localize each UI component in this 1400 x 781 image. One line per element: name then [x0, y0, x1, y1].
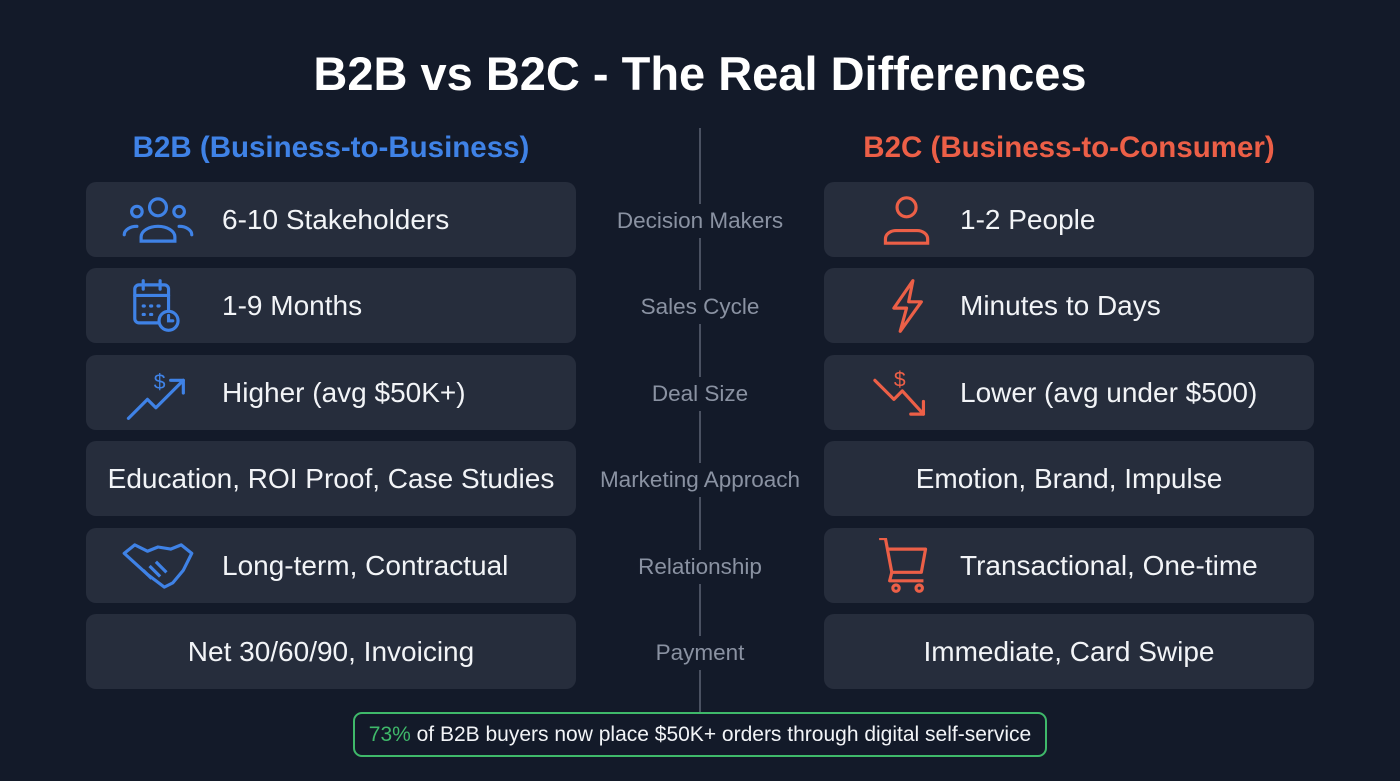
heading: B2B: B2B (Business-to-Business)	[133, 131, 529, 164]
B2B card: deal size: Higher (avg $50K+)	[222, 376, 466, 408]
B2C card: relationship: Transactional, One-time	[960, 550, 1258, 580]
B2C card: deal size	[824, 355, 1314, 430]
B2B card: months: 1-9 Months	[222, 290, 362, 320]
icon: trend up dollar	[126, 371, 185, 420]
icon: calendar clock	[133, 279, 180, 332]
label: decision makers: Decision Makers	[617, 208, 783, 233]
B2C card: people: 1-2 People	[960, 204, 1095, 234]
icon: handshake	[122, 543, 194, 589]
B2B card: payment: Net 30/60/90, Invoicing	[188, 636, 474, 666]
icon: cart	[879, 538, 928, 593]
B2B card: relationship: Long-term, Contractual	[222, 550, 508, 580]
label: deal size	[590, 377, 810, 411]
icon: trend up dollar: $	[154, 371, 166, 394]
B2B card: months	[86, 268, 576, 343]
B2C card: deal size: Lower (avg under $500)	[960, 376, 1257, 408]
B2B card: marketing	[86, 441, 576, 516]
label: relationship: Relationship	[638, 554, 762, 579]
icon: lightning	[892, 279, 923, 333]
center divider line	[699, 128, 701, 712]
callout: stat: 73% of B2B buyers now place $50K+ orders through digital self-service	[369, 723, 1031, 746]
B2C card: payment	[824, 614, 1314, 689]
label: sales cycle	[590, 290, 810, 324]
label: relationship	[590, 550, 810, 584]
B2C card: relationship	[824, 528, 1314, 603]
label: sales cycle: Sales Cycle	[641, 294, 759, 319]
label: payment	[590, 636, 810, 670]
B2B card: relationship	[86, 528, 576, 603]
callout: stat	[353, 712, 1047, 757]
B2B card: marketing: Education, ROI Proof, Case Studies	[108, 462, 554, 494]
B2C card: marketing	[824, 441, 1314, 516]
icon: group	[122, 197, 194, 243]
B2C card: sales cycle: Minutes to Days	[960, 290, 1161, 320]
label: marketing approach: Marketing Approach	[600, 467, 800, 492]
B2B card: stakeholders: 6-10 Stakeholders	[222, 204, 449, 234]
B2B card: deal size	[86, 355, 576, 430]
label: payment: Payment	[656, 640, 744, 665]
icon: trend down dollar: $	[894, 369, 906, 392]
label: deal size: Deal Size	[652, 381, 748, 406]
B2C card: payment: Immediate, Card Swipe	[923, 636, 1214, 666]
B2C card: sales cycle	[824, 268, 1314, 343]
B2C card: marketing: Emotion, Brand, Impulse	[916, 462, 1222, 494]
icon: person	[884, 196, 930, 245]
label: marketing approach	[590, 463, 810, 497]
B2C card: people	[824, 182, 1314, 257]
B2B card: payment	[86, 614, 576, 689]
B2B card: stakeholders	[86, 182, 576, 257]
icon: trend down dollar	[873, 369, 926, 416]
title: B2B vs B2C - The Real Differences	[313, 47, 1087, 100]
label: decision makers	[590, 204, 810, 238]
heading: B2C: B2C (Business-to-Consumer)	[863, 131, 1275, 164]
